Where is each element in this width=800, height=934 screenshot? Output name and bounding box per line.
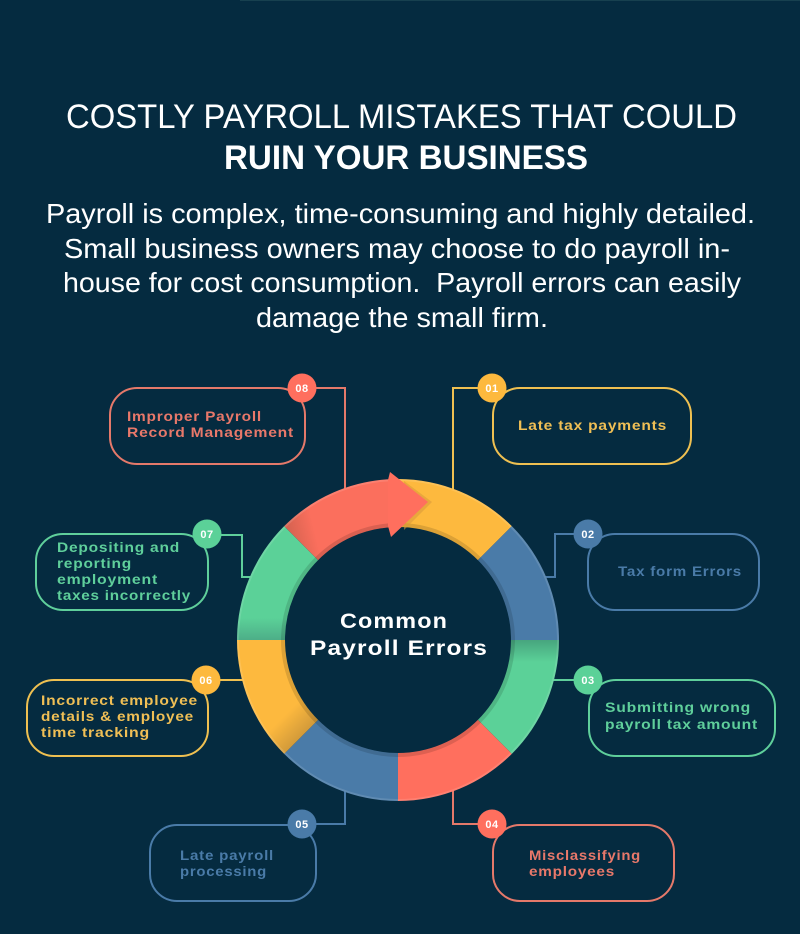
callout 03: submitting wrong payroll tax amount [550,666,775,756]
callout 02: tax form errors: 02 [581,529,595,541]
ring segment: blue 02 [478,526,559,640]
callout 03: submitting wrong payroll tax amount: payroll tax amount [605,716,758,732]
callout 07: depositing and reporting employment taxes incorrectly [36,520,254,610]
callout 01: late tax payments: 01 [485,383,499,395]
arrow shadow [404,481,432,530]
title: COSTLY PAYROLL MISTAKES THAT COULD [66,98,737,136]
callout 05: late payroll processing: Late payroll [180,847,274,863]
callout 04: misclassifying employees [453,790,674,901]
callout 02: tax form errors: Tax form Errors [618,563,742,579]
callout 08: improper payroll record management: Improper Payroll [127,408,262,424]
callout 07: depositing and reporting employment taxes incorrectly: 07 [200,529,214,541]
callout 08: improper payroll record management [110,374,345,492]
title [66,98,737,177]
center label: Payroll Errors [310,637,488,660]
callout 02: tax form errors [538,520,759,610]
callout 01: late tax payments: Late tax payments [518,417,667,433]
center label: Common [340,610,448,633]
callout 06: incorrect employee details and time tracking: details & employee [41,708,194,724]
ring segment: red 04 [398,720,512,801]
callout 08: improper payroll record management: 08 [295,383,309,395]
ring segment: blue 05 [284,720,398,801]
callout 04: misclassifying employees: Misclassifying [529,847,641,863]
ring segment: green 03 [478,640,559,754]
callout 04: misclassifying employees: 04 [485,819,499,831]
callout 07: depositing and reporting employment taxes incorrectly: Depositing and [57,539,180,555]
title: RUIN YOUR BUSINESS [224,139,588,177]
arrow head [388,472,428,537]
donut ring [237,472,559,801]
callout 05: late payroll processing [150,790,345,901]
ring segment: red 08 [284,479,392,560]
callout 07: depositing and reporting employment taxes incorrectly: taxes incorrectly [57,587,191,603]
intro paragraph: Payroll is complex, time-consuming and highly detailed. [46,198,755,229]
callout 06: incorrect employee details and time tracking: time tracking [41,724,150,740]
callout 08: improper payroll record management: Record Management [127,424,294,440]
callout 06: incorrect employee details and time tracking: 06 [199,675,213,687]
ring segment: green 07 [237,526,318,640]
callout 06: incorrect employee details and time tracking: Incorrect employee [41,692,198,708]
intro paragraph: house for cost consumption. Payroll errors can easily [63,267,741,298]
intro paragraph: Small business owners may choose to do payroll in- [64,233,730,264]
callout 06: incorrect employee details and time tracking [27,666,248,756]
callout 07: depositing and reporting employment taxes incorrectly: reporting [57,555,132,571]
intro paragraph: damage the small firm. [256,302,548,333]
callout 03: submitting wrong payroll tax amount: 03 [581,675,595,687]
intro paragraph [46,198,755,333]
callout 04: misclassifying employees: employees [529,863,615,879]
callout 03: submitting wrong payroll tax amount: Submitting wrong [605,699,751,715]
center label [310,610,488,660]
callout 05: late payroll processing: 05 [295,819,309,831]
callout 05: late payroll processing: processing [180,863,267,879]
ring segment: yellow 06 [237,640,318,754]
ring segment: yellow 01 [398,479,512,560]
callout 07: depositing and reporting employment taxes incorrectly: employment [57,571,158,587]
callout 01: late tax payments [453,374,691,492]
